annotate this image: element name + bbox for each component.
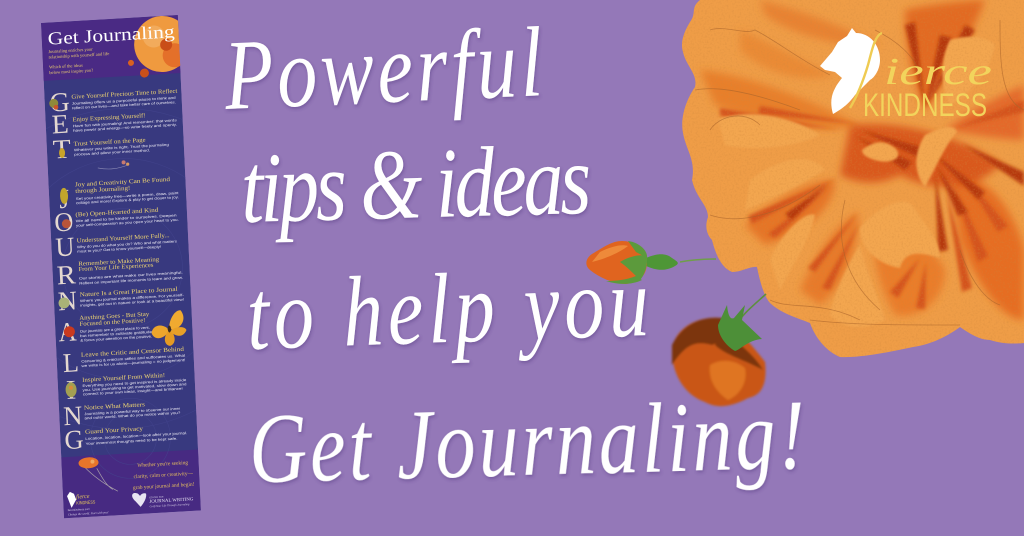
tip R: Remember to Make Meaning [78,256,159,268]
poster title: Get Journaling [47,21,175,49]
tip G (guard): Guard Your Privacy [85,425,144,436]
tip N (notice) [63,394,182,431]
tip A: but remember to cultivate gratitude [80,330,152,338]
poster flower [128,16,180,78]
tip N (nature): Where you journal makes a difference. For yourself- [80,293,184,303]
tip I: you. Use journaling to get motivated, slow down and [83,382,187,392]
tip J: through Journaling! [75,185,130,195]
tip A [58,311,153,347]
tip G [49,80,179,118]
tip G (guard): Your innermost thoughts need to be kept safe. [86,437,178,446]
flourish [98,160,129,170]
tip L: L [62,347,80,378]
logo wordmark: ierce [884,51,992,93]
tip A: A [58,316,78,347]
tip G (guard) [64,418,188,455]
footer call to action: grab your journal and begin! [133,482,195,491]
tip N (notice): N [63,400,83,431]
tip J: Set your creativity free—write a poem, draw, paint [76,191,179,201]
tip N (nature) [57,279,185,316]
tip N (nature): N [57,285,78,316]
tip U: U [55,231,75,262]
tip I: connect to your own ideas, insight—and brilliance! [83,387,183,396]
poster intro: Journaling enriches your [48,47,93,54]
tip O: (Be) Open-Hearted and Kind [75,207,160,219]
tip U [55,225,178,262]
footer logo: Center for Journal Writing: Craft Your Life Through Journaling [150,503,190,508]
tip A: Focused on the Positive! [79,317,146,328]
tip J: collage and more! Explore & play to get closer to joy. [76,195,179,205]
tip I: Everything you need to get inspired is already inside [82,378,186,388]
tapered streaks [720,22,1024,309]
tip L: we write is for us alone—journaling = no judgement! [81,358,185,368]
footer logo: Center for Journal Writing: JOURNAL WRITING [149,496,194,504]
tip R: From Your Life Experiences [78,262,154,273]
footer logo: Center for Journal Writing: CENTER FOR [149,496,164,499]
headline: Powerful [221,6,545,131]
poster intro: relationship with yourself and life [48,51,109,60]
soft petal shading [700,0,1024,320]
poster intro: Which of the ideas [49,63,83,70]
footer poppy [78,456,118,493]
tip G: reflect on our lives—and take better care of ourselves. [72,100,176,110]
tip J: J [59,184,70,214]
tip I [65,368,187,405]
tip U: Why do you do what you do? Who and what matters [77,239,177,249]
poster: Get Journaling [41,15,201,518]
tip G: G [49,86,70,118]
tip L: Leave the Critic and Censor Behind [81,346,185,359]
footer logo: Fierce Kindness: fiercekindness.com [68,507,90,512]
tip E [51,102,178,139]
footer logo: Fierce Kindness: Change the world. Start with you! [68,510,109,517]
tip J: Joy and Creativity Can Be Found [75,176,171,189]
poster intro: below most inspire you? [49,68,93,75]
tip O: We all need to be kinder to ourselves. Deepen [76,213,177,223]
footer logo: Fierce Kindness: fierce [76,493,90,501]
headline [221,6,806,504]
tip T: Trust Yourself on the Page [74,137,146,148]
tip N (notice): Notice What Matters [84,401,146,412]
tip A: Anything Goes - But Stay [79,311,150,322]
logo gold f [850,33,882,108]
tip N (nature): Nature Is a Great Place to Journal [80,286,178,299]
footer call to action: Whether you're seeking [137,460,189,469]
tip A: Our journals are a great place to vent, [80,326,150,334]
tip N (notice): and outer world. What do you notice within you? [84,411,180,420]
tip G: Journaling offers us a purposeful pause to think and [72,96,176,106]
tip T: Whatever you write is right. Trust the journaling [74,143,169,152]
tip R: Reflect on important life moments to learn and grow. [79,276,183,286]
tip T: process and allow your inner method. [74,148,150,157]
tip A: & focus your attention on the positive. [80,334,152,343]
tip R: R [56,259,76,290]
tip I: I [65,374,77,405]
headline: Get Journaling! [248,378,806,504]
headline: to help you [245,246,651,371]
flower: large orange bloom [680,0,1024,360]
tip J [58,176,179,214]
footer logo: Fierce Kindness [67,490,109,517]
tip L [62,341,186,378]
tip O [54,200,179,237]
tip E: Enjoy Expressing Yourself! [72,112,146,123]
petal outlines [695,20,1024,325]
small bud [586,241,716,284]
tip N (notice): Journaling is a powerful way to observe our inner [84,407,181,416]
grain texture [680,0,1024,360]
tip U: Understand Yourself More Fully... [77,232,170,245]
tip G (guard): Location, location, location—look after your journal. [85,431,187,441]
tip O: O [54,206,74,237]
tip E: Have fun with journaling! And remember: that words [73,118,177,128]
icon: butterfly [151,310,187,347]
logo kindness: KINDNESS [863,87,987,123]
logo: Fierce Kindness [820,28,992,123]
tip R [56,253,183,290]
poster intro [48,46,110,75]
tip N (nature): insights, get out in nature or look at a beautiful view! [80,298,184,308]
tip L: Censoring & criticism stifles and suffocates us. What [81,354,185,364]
footer call to action: clarity, calm or creativity— [133,471,194,480]
light front petals [718,37,995,327]
tip G (guard): G [64,424,84,455]
tip U: most to you? Get to know yourself—deeply! [77,245,161,254]
tip G: Give Yourself Precious Time to Reflect [71,88,178,101]
tip E: E [51,109,69,139]
tip E: have power and energy—so write freely and openly. [73,123,177,133]
footer logo: Center for Journal Writing [132,490,194,509]
footer call to action [132,460,195,491]
tip T [52,128,170,164]
tip T: T [52,133,72,164]
headline: tips & ideas [240,123,592,244]
large bud [672,294,766,406]
logo lion [820,28,880,114]
tip I: Inspire Yourself From Within! [82,372,165,384]
footer logo: Fierce Kindness: KINDNESS [76,499,95,506]
tip R: Our stories are what make our lives meaningful. [79,271,183,281]
tip O: your self-compassion as you open your heart to you. [76,218,179,228]
